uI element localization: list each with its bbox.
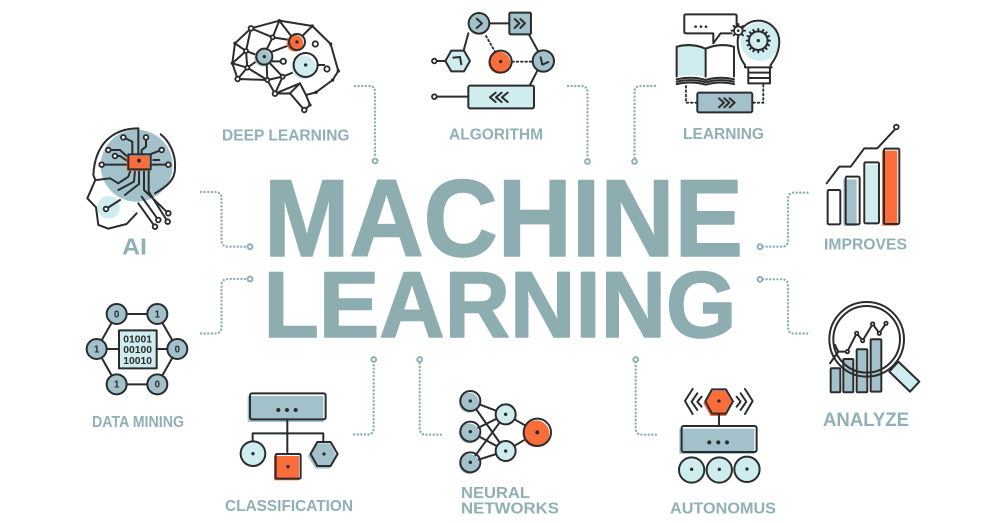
icon: neural network [459,391,551,474]
label: neural networks: NETWORKS [461,500,559,518]
icon: data mining network: 01001 [123,335,152,346]
connector: learning [632,86,655,164]
title: machine learning: MACHINE [264,158,743,280]
connector: improves [758,193,809,249]
connector: neural networks [417,357,441,435]
icon: analyze magnifier [829,302,919,392]
label: data mining: DATA MINING [92,414,184,431]
label: ai: AI [122,234,147,260]
label: neural networks: NEURAL [461,485,530,502]
icon: data mining network: 00100 [123,345,152,356]
icon: data mining network: 1 [94,344,100,355]
label: analyze: ANALYZE [823,410,909,431]
icon: data mining network: 0 [175,344,180,355]
icon: data mining network: 1 [114,380,120,391]
connector: data mining [201,277,252,334]
icon: data mining network: 0 [155,380,160,391]
title: machine learning: LEARNING [264,252,736,357]
icon: data mining network: 0 [114,309,119,320]
connector: analyze [758,277,809,334]
icon: classification tree [241,393,338,480]
label: classification: CLASSIFICATION [225,498,353,515]
label: improves: IMPROVES [824,236,907,254]
title: machine learning [264,158,743,357]
icon: ai head [87,128,175,229]
icon: learning book and bulb [677,14,779,112]
connector: classification [354,357,376,434]
label: autonomus: AUTONOMUS [670,500,776,518]
connector: ai [201,192,252,249]
icon: data mining network: 10010 [123,356,152,367]
icon: data mining network: 1 [155,309,161,320]
connector: autonomus [633,357,656,435]
icon: deep learning brain [231,19,340,112]
label: deep learning: DEEP LEARNING [222,128,350,144]
icon: algorithm [432,13,554,108]
label: learning: LEARNING [683,126,764,143]
label: neural networks [461,485,559,518]
icon: autonomous robot [679,389,760,483]
icon: improves bar chart [827,125,899,226]
icon: data mining network [87,304,187,394]
label: algorithm: ALGORITHM [449,127,543,144]
connector: deep learning [355,86,377,163]
connector: algorithm [568,86,590,164]
